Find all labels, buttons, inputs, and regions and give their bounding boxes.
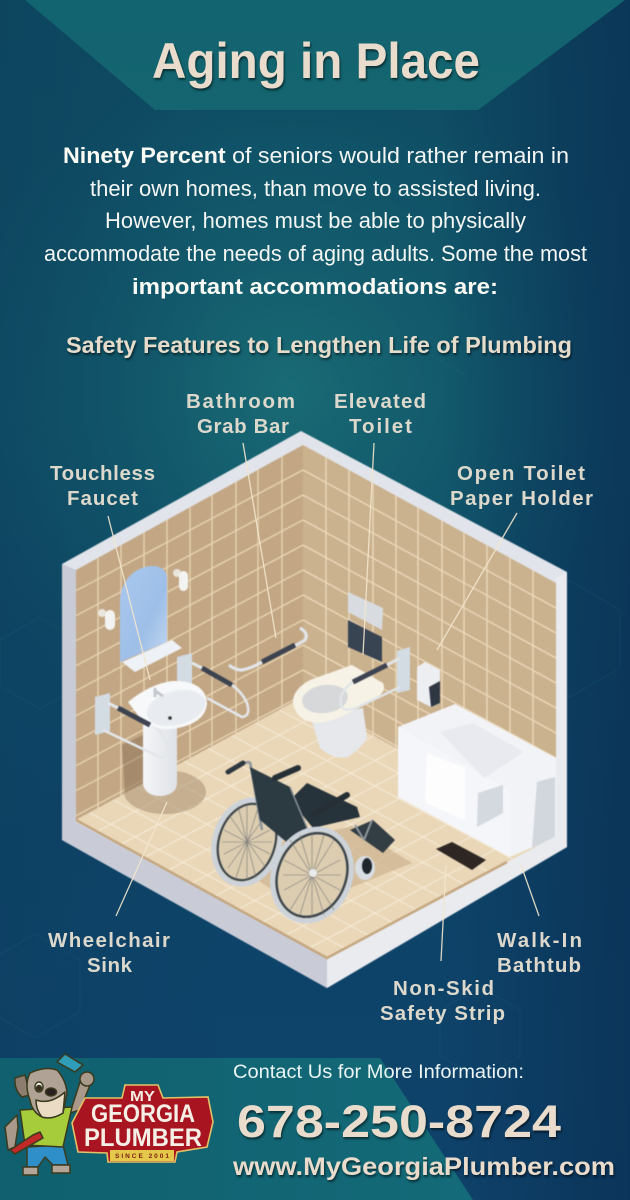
red badge xyxy=(72,1085,213,1162)
logo: MY xyxy=(130,1088,155,1105)
label: wheelchair sink: Sink xyxy=(87,954,133,977)
phone number: 678-250-8724 xyxy=(237,1096,561,1147)
logo: PLUMBER xyxy=(84,1124,202,1152)
wheelchair sink xyxy=(95,653,248,814)
subheading: Safety Features to Lengthen Life of Plumbing xyxy=(66,332,572,358)
label: open toilet paper holder: Paper Holder xyxy=(450,487,593,510)
elevated toilet xyxy=(293,592,410,758)
label: bathroom grab bar: Bathroom xyxy=(186,390,295,413)
label: elevated toilet: Elevated xyxy=(334,390,426,413)
logo: SINCE 2001 xyxy=(115,1153,169,1160)
label: bathroom grab bar: Grab Bar xyxy=(197,415,289,438)
non-skid safety strip xyxy=(436,842,486,870)
footer band xyxy=(0,1058,473,1200)
label: open toilet paper holder: Open Toilet xyxy=(457,462,585,485)
logo: GEORGIA xyxy=(91,1100,195,1128)
label: non-skid safety strip: Safety Strip xyxy=(380,1002,505,1025)
intro text xyxy=(44,143,587,299)
label: wheelchair sink: Wheelchair xyxy=(48,929,170,952)
label: touchless faucet: Touchless xyxy=(50,462,155,485)
label: non-skid safety strip: Non-Skid xyxy=(393,977,494,1000)
label: bathroom grab bar xyxy=(186,390,295,438)
contact text: Contact Us for More Information: xyxy=(233,1062,524,1083)
label: touchless faucet: Faucet xyxy=(67,487,138,510)
bathroom illustration xyxy=(62,431,567,988)
intro text: accommodate the needs of aging adults. Some the most xyxy=(44,241,587,266)
toilet paper holder xyxy=(417,662,440,707)
title banner xyxy=(25,0,625,110)
label: wheelchair sink xyxy=(48,929,170,977)
label: walk-in bathtub: Walk-In xyxy=(497,929,582,952)
title: Aging in Place xyxy=(152,33,480,89)
label: elevated toilet: Toilet xyxy=(349,415,412,438)
intro text: However, homes must be able to physically xyxy=(105,208,526,233)
label: touchless faucet xyxy=(50,462,155,510)
label: open toilet paper holder xyxy=(450,462,593,510)
callout lines xyxy=(108,443,539,961)
mirror and wall lights xyxy=(98,566,188,672)
website: www.MyGeorgiaPlumber.com xyxy=(232,1153,615,1181)
label: walk-in bathtub: Bathtub xyxy=(497,954,581,977)
intro text: their own homes, than move to assisted living. xyxy=(90,176,541,201)
intro text: important accommodations are: xyxy=(132,274,498,299)
walk-in bathtub xyxy=(398,704,556,857)
label: non-skid safety strip xyxy=(380,977,505,1025)
label: walk-in bathtub xyxy=(497,929,582,977)
label: elevated toilet xyxy=(334,390,426,438)
since band xyxy=(110,1150,174,1161)
icon: bulldog mascot xyxy=(5,1054,94,1175)
logo xyxy=(5,1054,213,1175)
intro text: Ninety Percent of seniors would rather remain in xyxy=(63,143,569,168)
wheelchair xyxy=(203,762,412,933)
wall grab bar xyxy=(229,628,306,670)
room shell xyxy=(62,431,567,988)
